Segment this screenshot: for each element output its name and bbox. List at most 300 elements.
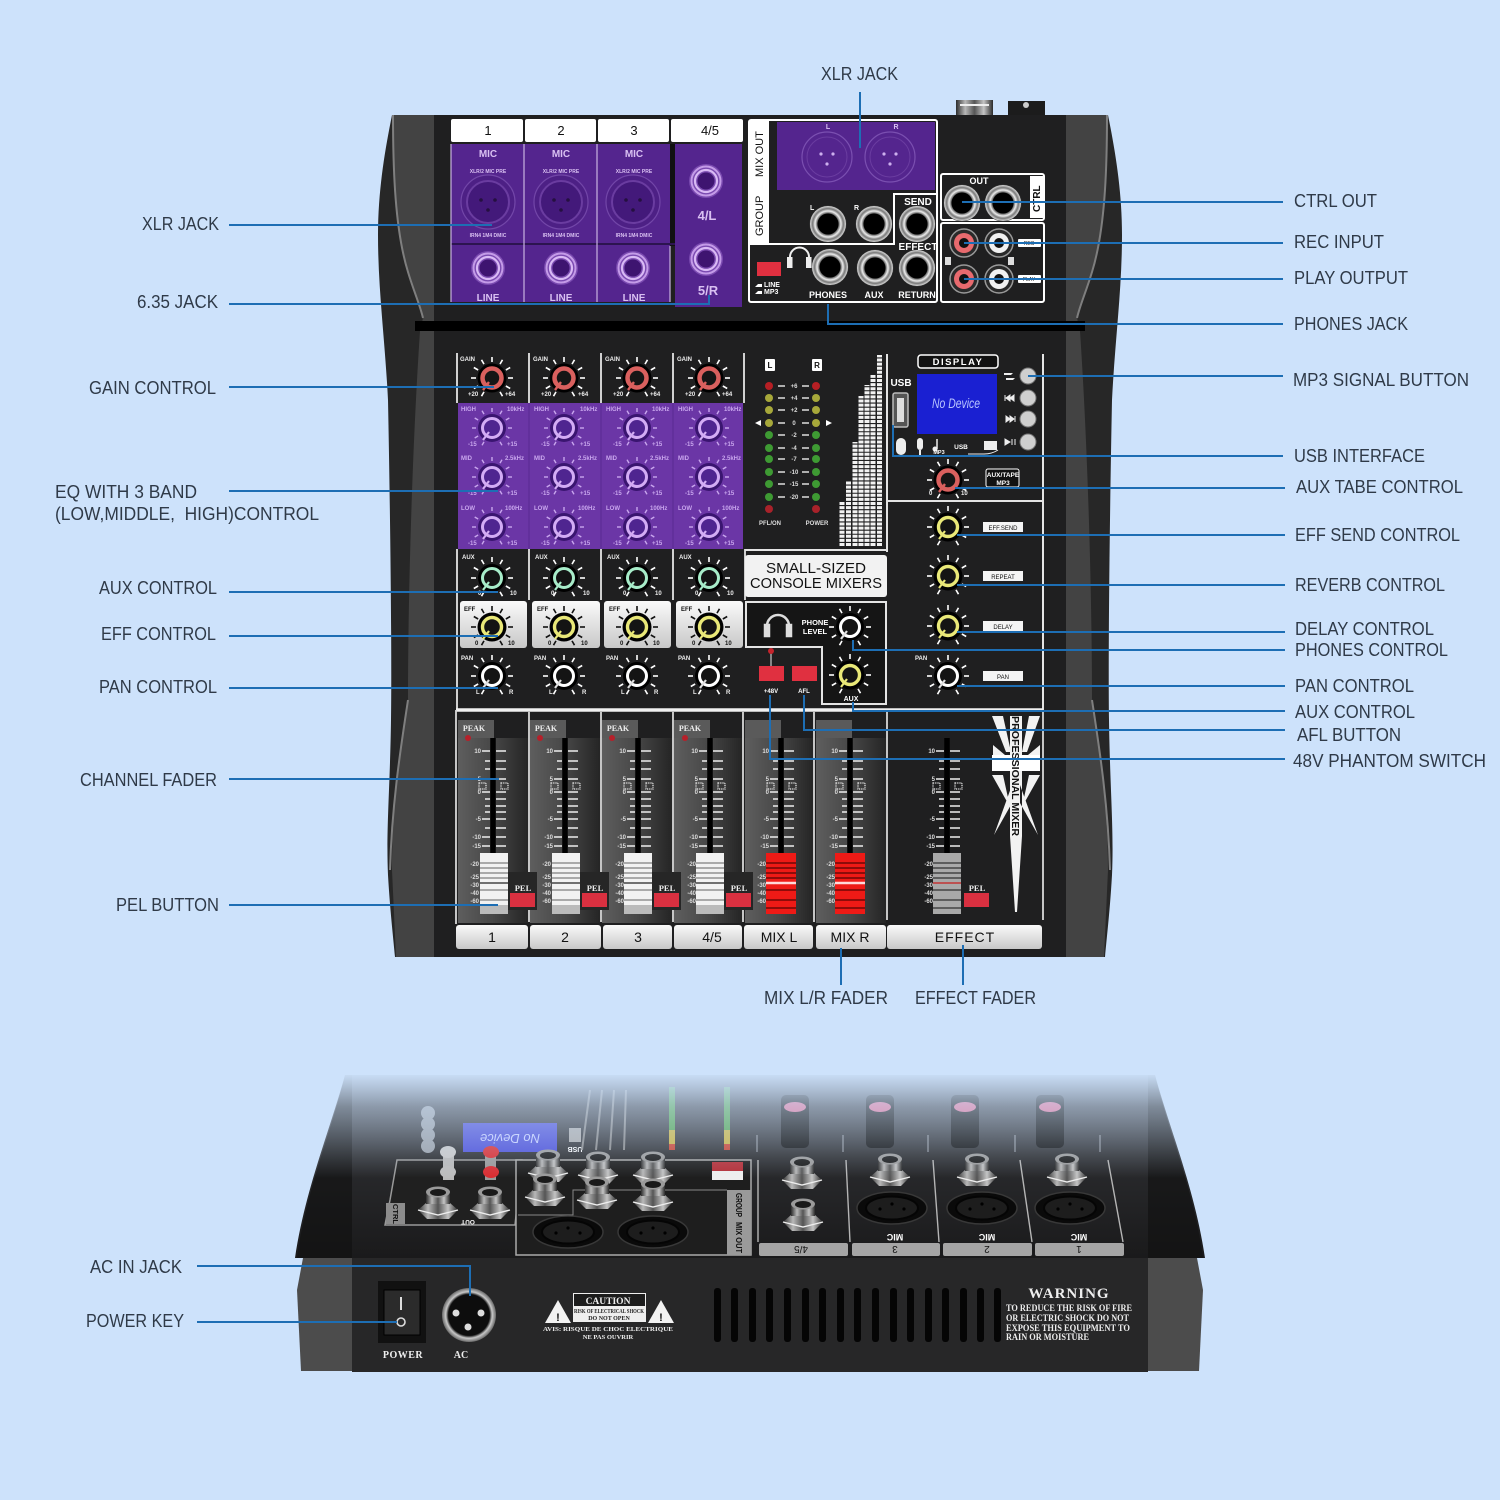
output jacks: R (854, 205, 859, 212)
caution label: ! (556, 1312, 560, 1324)
aux knobs: 0 (695, 591, 699, 597)
callout: 6.35 jack (137, 292, 709, 312)
eq purple panel: LOW (461, 506, 475, 512)
rear connectors on top edge (956, 100, 1045, 115)
phones panel: LEVEL (803, 627, 828, 636)
gain knobs: +64 (578, 392, 589, 398)
scale numbers: -10 (760, 835, 770, 841)
pan knobs: L (549, 690, 553, 696)
eq purple panel: 100Hz (505, 506, 522, 512)
purple input panel: IRN4 1M4 DMIC (543, 233, 580, 239)
aux/tape knob: MP3 (996, 480, 1010, 487)
eq purple panel: -15 (541, 541, 550, 547)
scale numbers: -15 (544, 844, 554, 850)
callouts: top and bottom (764, 64, 1036, 1008)
aux knobs: 10 (727, 591, 734, 597)
scale numbers: -40 (757, 891, 767, 897)
scale numbers: -2 (791, 433, 797, 439)
scale numbers: -30 (470, 883, 480, 889)
purple input panel: MIC (552, 149, 570, 160)
eq purple panel: -15 (685, 541, 694, 547)
eff knobs on white cards: 0 (475, 641, 479, 647)
eq purple panel: LOW (678, 506, 692, 512)
scale numbers: -30 (542, 883, 552, 889)
scale numbers: -25 (542, 875, 552, 881)
callout: phones control: PHONES CONTROL (1295, 640, 1448, 660)
gain knobs: +20 (685, 392, 696, 398)
gain knobs: GAIN (460, 357, 475, 363)
warning text: OR ELECTRIC SHOCK DO NOT (1006, 1313, 1129, 1323)
fade to background (285, 1068, 1215, 1178)
caution label: NE PAS OUVRIR (583, 1334, 634, 1341)
eff knobs on white cards (460, 601, 743, 648)
scale numbers: -15 (760, 844, 770, 850)
scale numbers: -20 (826, 862, 836, 868)
warning text (1006, 1286, 1132, 1342)
bottom channel tabs: MIX L (761, 929, 797, 945)
callout: aux control: AUX CONTROL (1295, 702, 1415, 722)
panel: ctrl out: CTRL (1032, 185, 1043, 212)
eq purple panel: -15 (541, 491, 550, 497)
eq purple panel: +15 (580, 491, 591, 497)
scale numbers: -20 (757, 862, 767, 868)
scale numbers: -5 (693, 817, 699, 823)
eq purple panel: LOW (534, 506, 548, 512)
bottom channel tabs: MIX R (831, 929, 869, 945)
rear input channels: 4/5 (794, 1243, 808, 1254)
level meter (745, 354, 887, 552)
callout: phones control (853, 640, 1448, 660)
warning text: WARNING (1028, 1286, 1110, 1302)
callout: pel button: PEL BUTTON (116, 895, 219, 915)
caution label: ! (659, 1312, 663, 1324)
eq purple panel: +15 (580, 442, 591, 448)
panel: mix out group (749, 120, 937, 302)
channel number tabs: 3 (630, 123, 638, 138)
scale numbers: -15 (617, 844, 627, 850)
callout: play output: PLAY OUTPUT (1294, 268, 1408, 288)
purple input panel: 5/R (698, 283, 719, 298)
gain knobs: +20 (468, 392, 479, 398)
scale numbers: 0 (550, 790, 554, 796)
eq purple panel: HIGH (606, 407, 621, 413)
scale numbers: 0 (695, 790, 699, 796)
scale numbers: -20 (687, 862, 697, 868)
channel number tabs (451, 119, 743, 142)
scale numbers: -25 (687, 875, 697, 881)
power switch (378, 1281, 426, 1361)
eff knobs on white cards: 0 (620, 641, 624, 647)
vent slots (714, 1288, 1001, 1342)
rear level meters (582, 1087, 730, 1150)
gain knobs: +64 (505, 392, 516, 398)
pan knobs: L (693, 690, 697, 696)
eq purple panel: -15 (685, 491, 694, 497)
fader scales (479, 738, 962, 853)
panel: rca in/out: REC (1024, 241, 1035, 247)
eq purple panel: 2.5kHz (722, 456, 741, 462)
callout: top xlr jack (821, 64, 898, 148)
scale numbers: -20 (470, 862, 480, 868)
purple input panel (451, 144, 742, 307)
callout: phones jack: PHONES JACK (1294, 314, 1408, 334)
eq purple panel: 100Hz (722, 506, 739, 512)
callout: aux control: AUX CONTROL (99, 578, 217, 598)
callout: channel fader: CHANNEL FADER (80, 770, 217, 790)
mixer: rear view (285, 1068, 1215, 1372)
pan knobs: PAN (534, 656, 546, 662)
aux knobs: AUX (462, 555, 475, 561)
scale numbers: -7 (791, 457, 797, 463)
icon: headphones (765, 615, 791, 636)
eq purple panel: HIGH (461, 407, 476, 413)
scale numbers: +6 (791, 384, 798, 390)
callout: eq with 3 band: (LOW,MIDDLE, HIGH)CONTROL (55, 504, 319, 524)
scale numbers: 0 (623, 790, 627, 796)
scale numbers: -60 (924, 899, 934, 905)
purple input panel: 4/L (698, 208, 716, 223)
scale numbers: 0 (835, 790, 839, 796)
scale numbers: +4 (791, 396, 798, 402)
peak LEDs: PEAK (463, 724, 486, 733)
scale numbers: -10 (790, 470, 799, 476)
eff knobs on white cards: EFF (681, 607, 693, 613)
caution label (543, 1293, 674, 1341)
eff knobs on white cards: EFF (609, 607, 621, 613)
scale numbers: -60 (542, 899, 552, 905)
bottom channel tabs: 4/5 (702, 929, 722, 945)
gain knobs: GAIN (533, 357, 548, 363)
eq purple panel: +15 (507, 541, 518, 547)
eq purple panel: +15 (724, 442, 735, 448)
callout: 6.35 jack: 6.35 JACK (137, 292, 218, 312)
mix out / group strip: GROUP (754, 196, 766, 236)
eq purple panel: +15 (652, 541, 663, 547)
USB port: USB (890, 378, 912, 389)
rear input channels: MIC (1070, 1232, 1087, 1242)
scale numbers: -5 (548, 817, 554, 823)
eq purple panel: 2.5kHz (505, 456, 524, 462)
pan knobs: L (476, 690, 480, 696)
L/R tags: L (768, 361, 773, 370)
eq purple panel: -15 (613, 541, 622, 547)
warning text: EXPOSE THIS EQUIPMENT TO (1006, 1323, 1130, 1333)
scale numbers: -5 (621, 817, 627, 823)
scale numbers: 5 (550, 777, 554, 783)
pan knobs: PAN (606, 656, 618, 662)
scale numbers: -15 (790, 482, 799, 488)
scale numbers: 5 (478, 777, 482, 783)
scale numbers: -40 (924, 891, 934, 897)
callout: gain control: GAIN CONTROL (89, 378, 216, 398)
callout: aux tabe control: AUX TABE CONTROL (1296, 477, 1463, 497)
panel: input channels (451, 119, 743, 307)
scale numbers: -15 (689, 844, 699, 850)
eq purple panel: 100Hz (650, 506, 667, 512)
gain knobs: GAIN (677, 357, 692, 363)
eff knobs on white cards: 0 (692, 641, 696, 647)
panel: ctrl out: OUT (970, 176, 989, 186)
rear input channels: 3 (892, 1243, 898, 1254)
callout: effect fader (915, 945, 1036, 1008)
pan knobs: L (621, 690, 625, 696)
aux knobs: 10 (655, 591, 662, 597)
gain knobs: +64 (722, 392, 733, 398)
bottom channel tabs (456, 925, 1042, 949)
scale numbers: 0 (766, 790, 770, 796)
bottom channel tabs: 3 (634, 929, 642, 945)
scale numbers: -25 (826, 875, 836, 881)
scale numbers: -5 (476, 817, 482, 823)
scale numbers: -10 (829, 835, 839, 841)
aux knobs: AUX (679, 555, 692, 561)
scale numbers: 10 (619, 749, 627, 755)
scale numbers: +2 (791, 408, 798, 414)
line/mp3 switch: MP3 (764, 289, 778, 296)
callout: afl button: AFL BUTTON (1297, 725, 1401, 745)
repeat tag: REPEAT (991, 575, 1015, 581)
pan knobs: R (726, 690, 731, 696)
rear ctrl and rca panel: OUT (461, 1218, 475, 1225)
scale numbers: -5 (764, 817, 770, 823)
union jack emblem: PROFESSIONAL MIXER (1009, 716, 1021, 836)
callout: 48v phantom switch: 48V PHANTOM SWITCH (1293, 751, 1486, 771)
output jacks: AUX (864, 290, 884, 300)
eff knobs on white cards: EFF (464, 607, 476, 613)
scale numbers: -60 (757, 899, 767, 905)
purple input panel: LINE (550, 293, 573, 304)
purple input panel: IRN4 1M4 DMIC (470, 233, 507, 239)
L/R tags (765, 359, 822, 371)
scale numbers (759, 384, 829, 527)
rear side panels (297, 1075, 1203, 1258)
peak LEDs (463, 724, 702, 741)
fader section (456, 710, 1043, 949)
L/R tags: R (814, 361, 820, 370)
eq purple panel: -15 (468, 541, 477, 547)
callouts: left side (55, 214, 709, 1331)
scale numbers: -10 (689, 835, 699, 841)
rear input channels: 2 (984, 1243, 990, 1254)
AC inlet: AC (454, 1350, 468, 1361)
eq purple panel: +15 (507, 442, 518, 448)
scale numbers: -15 (472, 844, 482, 850)
eq purple panel: 10kHz (652, 407, 669, 413)
LEDs (755, 382, 832, 513)
peak LEDs: PEAK (607, 724, 630, 733)
aux knobs: AUX (607, 555, 620, 561)
aux knobs: AUX (535, 555, 548, 561)
scale numbers: -30 (924, 883, 934, 889)
callout: pan control: PAN CONTROL (1295, 676, 1414, 696)
aux knobs: 0 (623, 591, 627, 597)
callout: top xlr jack: XLR JACK (821, 64, 898, 84)
eff knobs on white cards: 0 (548, 641, 552, 647)
phones panel: PHONE (802, 618, 828, 627)
scale numbers: -60 (687, 899, 697, 905)
scale numbers: POWER (806, 521, 829, 527)
rear buttons and usb: USB (568, 1145, 582, 1152)
rear input channels: 1 (1076, 1243, 1082, 1254)
scale numbers: 0 (792, 421, 796, 427)
callout: ctrl out: CTRL OUT (1294, 191, 1377, 211)
aux/tape knob: 10 (961, 491, 968, 497)
bottom channel tabs: 2 (561, 929, 569, 945)
display title: DISPLAY (933, 357, 983, 368)
scale numbers: 10 (546, 749, 554, 755)
output jacks: EFFECT (899, 242, 937, 253)
callout: rec input: REC INPUT (1294, 232, 1384, 252)
eq purple panel: 10kHz (724, 407, 741, 413)
scale numbers: -15 (926, 844, 936, 850)
scale numbers: -10 (472, 835, 482, 841)
callout: eff control: EFF CONTROL (101, 624, 216, 644)
eq purple panel: 2.5kHz (578, 456, 597, 462)
scale numbers (470, 749, 936, 905)
callout: 48v phantom switch (770, 695, 1486, 771)
top surface (295, 1075, 1205, 1258)
scale numbers: -40 (542, 891, 552, 897)
line/mp3 switch: LINE (764, 282, 780, 289)
callout: usb interface: USB INTERFACE (1294, 446, 1425, 466)
display title (918, 355, 998, 368)
transport buttons (1004, 368, 1036, 450)
panel: rca in/out: PLAY (1023, 277, 1036, 283)
eq purple panel: +15 (724, 491, 735, 497)
title card: small-sized console mixers: CONSOLE MIXERS (750, 575, 882, 592)
scale numbers: -30 (757, 883, 767, 889)
effects section (915, 506, 1023, 694)
callout: aux control (853, 702, 1415, 722)
purple input panel: XLR/2 MIC PRE (616, 169, 653, 175)
scale numbers: -20 (615, 862, 625, 868)
scale numbers: -25 (924, 875, 934, 881)
scale numbers: -30 (687, 883, 697, 889)
callout: mix l/r fader (764, 948, 888, 1008)
scale numbers: -5 (930, 817, 936, 823)
callout: ac in jack: AC IN JACK (90, 1257, 182, 1277)
eq purple panel: -15 (541, 442, 550, 448)
pan knobs: R (654, 690, 659, 696)
scale numbers: 10 (831, 749, 839, 755)
aux knobs: 10 (583, 591, 590, 597)
rear input channels: MIC (886, 1232, 903, 1242)
scale numbers: -10 (926, 835, 936, 841)
mix out / group strip: MIX OUT (754, 131, 766, 177)
warning text: TO REDUCE THE RISK OF FIRE (1006, 1303, 1132, 1313)
callouts: right side (770, 191, 1486, 771)
scale numbers: 0 (478, 790, 482, 796)
purple xlr outputs: R (893, 124, 899, 131)
pan knobs: PAN (678, 656, 690, 662)
USB port (890, 378, 912, 427)
power switch: POWER (383, 1350, 423, 1361)
scale numbers: 10 (691, 749, 699, 755)
phones panel (746, 602, 886, 704)
effects section: PAN (915, 656, 927, 662)
eq purple panel: 10kHz (580, 407, 597, 413)
pel buttons (508, 872, 989, 910)
aux knobs: 0 (478, 591, 482, 597)
aux knobs: 0 (551, 591, 555, 597)
delay tag (983, 621, 1023, 631)
scale numbers: -25 (615, 875, 625, 881)
scale numbers: 5 (766, 777, 770, 783)
callout: mix l/r fader: MIX L/R FADER (764, 988, 888, 1008)
callout: phones jack (828, 304, 1408, 334)
pel buttons: PEL (731, 883, 748, 893)
repeat tag (983, 571, 1023, 581)
eq purple panel: -15 (468, 491, 477, 497)
scale numbers: -5 (833, 817, 839, 823)
mix out / group strip (749, 120, 937, 245)
eff send tag: EFF.SEND (988, 526, 1018, 532)
callout: ac in jack (90, 1257, 470, 1296)
callout: effect fader: EFFECT FADER (915, 988, 1036, 1008)
caution label: AVIS: RISQUE DE CHOC ELECTRIQUE (543, 1326, 673, 1333)
scale numbers: -20 (790, 495, 799, 501)
inverted LCD (463, 1123, 557, 1152)
eff knobs on white cards: EFF (537, 607, 549, 613)
scale numbers: 5 (835, 777, 839, 783)
eq purple panel: -15 (468, 442, 477, 448)
scale numbers: -25 (757, 875, 767, 881)
pel buttons: PEL (515, 883, 532, 893)
gain knobs: +20 (613, 392, 624, 398)
eq purple panel: MID (461, 456, 473, 462)
eff knobs on white cards: 10 (725, 641, 732, 647)
bottom channel tabs: EFFECT (935, 929, 995, 945)
front panel (297, 1258, 1203, 1372)
scale numbers: -30 (826, 883, 836, 889)
pan knobs: R (509, 690, 514, 696)
channel number tabs: 1 (484, 123, 492, 138)
48v and afl switches: AFL (798, 689, 810, 695)
aux knobs: 10 (510, 591, 517, 597)
callout: delay control: DELAY CONTROL (1295, 619, 1434, 639)
channel number tabs: 2 (557, 123, 565, 138)
source icons (896, 438, 998, 456)
pan tag (983, 671, 1023, 681)
scale numbers: -40 (687, 891, 697, 897)
AC inlet (442, 1288, 496, 1361)
callout: pan control: PAN CONTROL (99, 677, 217, 697)
eq purple panel: 2.5kHz (650, 456, 669, 462)
gain knobs: GAIN (605, 357, 620, 363)
output jacks: L (810, 205, 815, 212)
callout: reverb control: REVERB CONTROL (1295, 575, 1445, 595)
white channel dividers (457, 353, 745, 710)
phones panel: AUX (844, 696, 859, 703)
eff knobs on white cards: 10 (581, 641, 588, 647)
scale numbers: -30 (615, 883, 625, 889)
purple input panel: LINE (477, 293, 500, 304)
scale numbers: -20 (924, 862, 934, 868)
title card: small-sized console mixers: SMALL-SIZED (766, 560, 866, 577)
source icons: USB (954, 444, 968, 451)
bottom channel tabs: 1 (488, 929, 496, 945)
rear ctrl and rca panel (385, 1146, 522, 1225)
scale numbers: 5 (695, 777, 699, 783)
eq purple panel: +15 (580, 541, 591, 547)
eq purple panel: +15 (652, 491, 663, 497)
scale numbers: -60 (615, 899, 625, 905)
aux knobs (462, 555, 734, 597)
panel: channel strip controls (457, 353, 745, 710)
channel number tabs: 4/5 (701, 123, 719, 138)
gain knobs: +64 (650, 392, 661, 398)
scale numbers: -40 (615, 891, 625, 897)
